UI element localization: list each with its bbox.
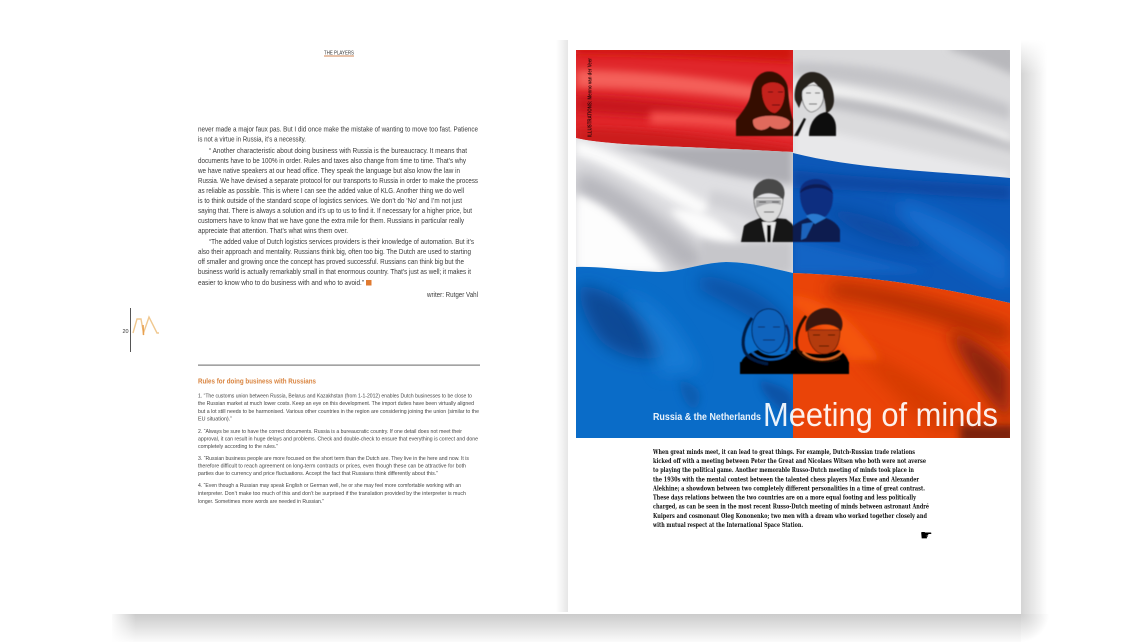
rules list: the Russian market at much lower costs. Keep an eye on this development. The import duties have been virtually aligned	[198, 401, 474, 407]
page shadow	[110, 40, 1051, 642]
middle-right blue area	[793, 150, 1010, 310]
top-left red area	[576, 50, 793, 152]
intro text: right page: These days relations between the two countries are on a more equal footing and less politically	[653, 494, 916, 502]
title: Meeting of minds: Meeting of minds	[763, 396, 998, 433]
rules list	[198, 394, 479, 505]
rules list: interpreter. Don’t make too much of this and don’t be surprised if the translation provided by the interpreter is much	[198, 491, 466, 497]
intro text: right page: to playing the political game. Another memorable Russo-Dutch meeting of minds took place in	[653, 466, 914, 474]
portraits: Andre Kuipers and Oleg Kononenko	[740, 308, 849, 374]
kicker: Russia and the Netherlands: Russia & the Netherlands	[653, 412, 761, 423]
article text: left page: appreciate that attention. That’s what wins them over.	[198, 226, 348, 235]
rules list: approval, it can result in huge delays and problems. Check and double-check to ensure that everything is correct and done	[198, 436, 478, 442]
intro text: right page: Kuipers and cosmonaut Oleg Kononenko; two men with a dream who worked together closely and	[653, 512, 927, 520]
article text: left page	[197, 124, 478, 299]
magazine spread pages	[112, 40, 1021, 614]
rules list: 3. “Russian business people are more focused on the short term than the Dutch are. They live in the here and now. It is	[198, 456, 469, 462]
rules list: but a lot still needs to be harmonised. Various other countries in the region are considering joining the union (similar to the	[198, 409, 479, 415]
article text: left page: as reliable as possible. This is where I can see the added value of KLG. Another thing we do well	[198, 186, 464, 195]
article text: left page: saying that. There is always a solution and it’s up to us to find it. If necessary for a higher price, but	[198, 206, 472, 215]
article text: left page: is to think outside of the standard scope of logistics services. We don’t do ‘No’ and I’m not just	[198, 196, 462, 205]
hero image: Russian flag with Dutch colours	[576, 44, 1016, 444]
heading: rules for doing business: Rules for doing business with Russians	[198, 376, 316, 386]
intro text: right page: Alekhine; a showdown between two completely different personalities in a time of great contrast.	[652, 484, 925, 492]
article text: left page: is not a virtue in Russia, it’s a necessity.	[198, 134, 306, 144]
rules list: therefore difficult to reach agreement on long-term contracts or prices, even though these can be attractive for both	[198, 464, 466, 470]
folio: page number and logo: 20	[122, 329, 129, 335]
rules list: completely according to the rules.”	[198, 444, 278, 450]
article text: left page: never made a major faux pas. But I did once make the mistake of wanting to move too fast. Patience	[198, 124, 478, 134]
folio: page number and logo	[122, 308, 159, 352]
divider rule	[198, 365, 480, 366]
rules list: parties due to currency and price fluctuations. Accept the fact that Russians think differently about this.”	[198, 471, 438, 477]
article text: left page: also their approach and mentality. Russians think big, often too big. The Dutch are used to starting	[198, 247, 471, 256]
rules list: 4. “Even though a Russian may speak English or German well, he or she may feel more comfortable working with an	[198, 483, 461, 489]
article text: left page: customers have to know that we have gone the extra mile for them. Russians in particular really	[198, 216, 464, 225]
intro text: right page: the 1930s with the mental contest between the talented chess players Max Euwe and Alexander	[653, 475, 919, 483]
top-right white area	[793, 50, 1010, 178]
article text: left page: writer: Rutger Vahl	[426, 290, 478, 299]
rules list: 2. “Always be sure to have the correct documents. Russia is a bureaucratic country. If one detail does not meet their	[198, 429, 462, 435]
illustration credit: ILLUSTRATIONS: Menno van der Veer	[588, 57, 594, 137]
article text: left page: Russia. We have devised a separate protocol for our transports to Russia in order to make the process	[198, 176, 478, 185]
article text: left page: “The added value of Dutch logistics services providers is their knowledge of automation. But it’s	[209, 237, 474, 246]
rules list: EU situation).”	[198, 417, 232, 423]
bottom-left blue area	[576, 260, 793, 440]
intro text: right page: kicked off with a meeting between Peter the Great and Nicolaes Witsen who both were not averse	[653, 457, 926, 465]
running header: the players: THE PLAYERS	[324, 50, 354, 56]
article text: left page: easier to know who to do business with and who to avoid.”	[198, 278, 365, 287]
intro text: right page: charged, as can be seen in the most recent Russo-Dutch meeting of minds between astronaut André	[653, 503, 929, 511]
intro text: right page: with mutual respect at the International Space Station.	[652, 521, 803, 529]
article text: left page: documents have to be 100% in order. Rules and taxes also change from time to time. That’s why	[198, 156, 466, 165]
article text: left page: “ Another characteristic about doing business with Russia is the bureaucracy. It means that	[209, 146, 467, 155]
article text: left page: we have native speakers at our head office. They speak the language but also know the law in	[197, 166, 460, 175]
intro text: right page: When great minds meet, it can lead to great things. For example, Dutch-Russian trade relations	[652, 448, 915, 456]
portraits: Max Euwe and Alexander Alekhine	[741, 179, 840, 242]
intro text: right page	[652, 448, 929, 529]
middle-left white area	[576, 130, 793, 280]
article text: left page: off smaller and growing once the concept has proved successful. Russians can think big but the	[198, 257, 464, 266]
article text: left page: business world is actually remarkably small in that enormous country. That’s just as well; it makes it	[198, 267, 471, 276]
rules list: 1. “The customs union between Russia, Belarus and Kazakhstan (from 1-1-2012) enables Dutch businesses to be close to	[198, 394, 472, 400]
portraits: Peter the Great and Nicolaes Witsen	[736, 71, 836, 136]
bottom-right orange area	[793, 270, 1016, 444]
rules list: longer. Sometimes more words are needed in Russian.”	[198, 499, 324, 505]
icon: pointing hand: ☛	[920, 528, 933, 544]
